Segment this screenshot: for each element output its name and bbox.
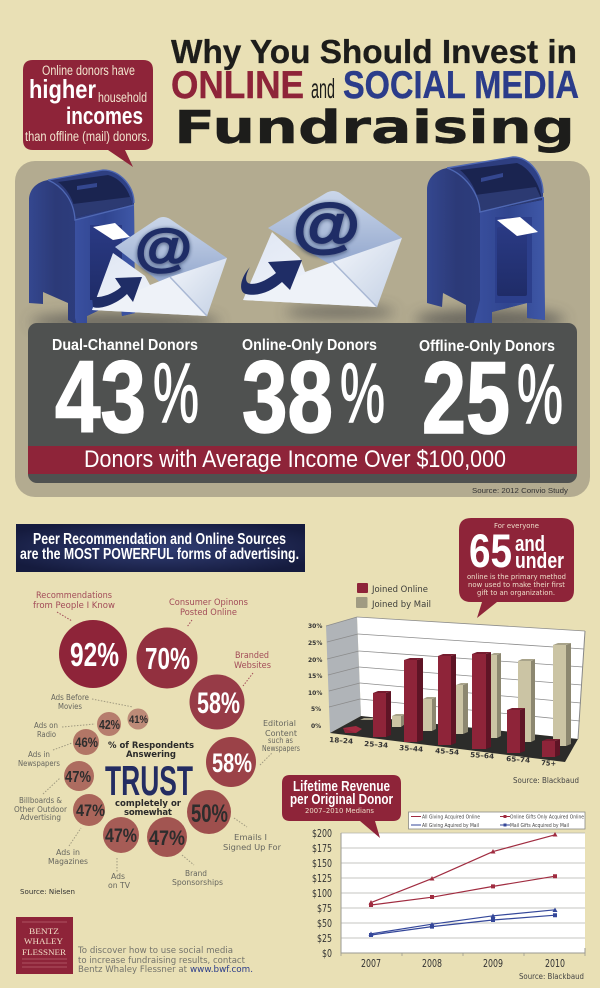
- bubble: ads on radio 42%: Ads on: [34, 721, 58, 730]
- axis labels: age groups: 75+: [541, 759, 557, 768]
- y axis labels: $175: [312, 843, 332, 855]
- bubble: consumer opinions 70%: 70%: [145, 641, 190, 676]
- title: Why You Should Invest in: [171, 33, 577, 70]
- 3d bar chart: joined online vs mail: [308, 583, 585, 785]
- callout: 65 and under: online is the primary method: [467, 573, 566, 581]
- bubble: recommendations 92%: Recommendations: [36, 591, 113, 601]
- logo: bentz whaley flessner: WHALEY: [24, 936, 63, 946]
- bubble: editorial content 58%: Content: [265, 729, 297, 738]
- legend: bars: [356, 583, 431, 610]
- center label: trust: [105, 741, 194, 818]
- bubble: billboards 47%: Advertising: [20, 813, 61, 822]
- panel: donor income: [15, 157, 590, 497]
- bubble: ads in newspapers 46%: 46%: [75, 734, 98, 750]
- footer text: To discover how to use social media: [77, 946, 233, 956]
- callout: 65 and under: For everyone: [494, 522, 539, 530]
- icon: arrow left: [92, 277, 142, 308]
- bubble: ads on radio 42%: [34, 712, 121, 739]
- bubble: ads on tv 47%: Ads: [111, 872, 125, 881]
- bubble: ads before movies 41%: [51, 693, 148, 730]
- series: mail gifts: [369, 913, 557, 937]
- source: convio: Source: 2012 Convio Study: [472, 486, 568, 495]
- axis labels: age groups: 45–54: [435, 747, 459, 757]
- bubble: consumer opinions 70%: Consumer Opinons: [169, 598, 249, 608]
- y axis labels: $75: [317, 903, 332, 915]
- axis labels: age groups: 35–44: [399, 744, 423, 754]
- axis labels: percent: 20%: [308, 657, 322, 664]
- stat: offline-only donors: %: [517, 347, 563, 441]
- icon: center envelope: [241, 191, 402, 307]
- y axis labels: $200: [312, 828, 332, 840]
- bubble: recommendations 92%: 92%: [70, 636, 119, 673]
- callout: lifetime revenue: [282, 775, 401, 838]
- y axis labels: $25: [317, 933, 332, 945]
- bubble: emails 50%: Signed Up For: [223, 843, 282, 852]
- bubble: ads on tv 47%: [103, 817, 139, 890]
- center label: trust: TRUST: [105, 757, 193, 804]
- bubble: billboards 47%: [14, 761, 94, 822]
- bubble: editorial content 58%: [206, 719, 300, 787]
- bubble: ads on tv 47%: 47%: [105, 826, 137, 847]
- footer text: Bentz Whaley Flessner at: [78, 965, 188, 975]
- x axis labels: 2007: [361, 958, 381, 970]
- logo: bentz whaley flessner: [16, 917, 73, 974]
- source: blackbaud bottom: Source: Blackbaud: [519, 972, 584, 981]
- bubble: billboards 47%: 47%: [65, 769, 91, 786]
- x axis labels: 2010: [545, 958, 565, 970]
- callout: higher incomes: higher: [29, 74, 96, 104]
- callout: lifetime revenue: per Original Donor: [290, 791, 393, 808]
- icon: at sign center: @: [293, 192, 360, 258]
- bubble: brand sponsorships 47%: [147, 817, 223, 887]
- title: [171, 33, 579, 154]
- banner: peer recommendation: are the MOST POWERFUL forms of advertising.: [20, 546, 299, 563]
- y axis labels: $100: [312, 888, 332, 900]
- title: Fundraising: [174, 101, 575, 154]
- stat: dual-channel donors: Dual-Channel Donors: [52, 337, 198, 354]
- stat: dual-channel donors: 43: [55, 340, 146, 454]
- bubble: emails 50%: 50%: [191, 800, 228, 828]
- footer text: [77, 946, 253, 975]
- x axis labels: 2009: [483, 958, 503, 970]
- bubble: branded websites 58%: Websites: [234, 661, 272, 671]
- line chart: lifetime revenue: [312, 812, 585, 981]
- stat: dual-channel donors: %: [153, 346, 199, 440]
- icon: center envelope: @: [293, 193, 360, 259]
- bubble: billboards 47%: Other Outdoor: [14, 805, 68, 814]
- stat: online-only donors: 38: [242, 340, 333, 454]
- bubble: editorial content 58%: 58%: [212, 748, 252, 778]
- stat: offline-only donors: 25: [422, 341, 510, 455]
- axis labels: age groups: 18–24: [329, 736, 353, 746]
- plot area: [341, 833, 585, 956]
- income banner: Donors with Average Income Over $100,000: [84, 446, 506, 473]
- bubble: ads on tv 47%: on TV: [108, 881, 130, 890]
- stat: offline-only donors: Offline-Only Donors: [419, 338, 555, 355]
- mailbox shadows: [30, 306, 565, 331]
- axis labels: percent: 30%: [308, 623, 322, 630]
- bars: joined online: [343, 652, 560, 757]
- axis labels: percent: 15%: [308, 673, 322, 680]
- bars: joined by mail: [360, 643, 571, 746]
- banner: peer recommendation: [16, 524, 305, 572]
- axis labels: percent: 5%: [311, 706, 321, 713]
- callout: higher incomes: [23, 60, 153, 167]
- bubble: editorial content 58%: Newspapers: [262, 744, 300, 753]
- bubble: ads before movies 41%: Ads Before: [51, 693, 89, 702]
- footer text: www.bwf.com.: [190, 965, 253, 975]
- icon: right mailbox: [427, 157, 545, 330]
- bubble: magazines 47%: Ads in: [56, 848, 80, 857]
- source: blackbaud top: Source: Blackbaud: [513, 776, 579, 785]
- series: all giving mail: [368, 908, 558, 936]
- banner: peer recommendation: Peer Recommendation and Online Sources: [33, 531, 286, 548]
- bubble: billboards 47%: Billboards &: [19, 796, 62, 805]
- x axis labels: [361, 958, 565, 970]
- callout: 65 and under: [459, 518, 574, 618]
- source: nielsen: Source: Nielsen: [20, 888, 75, 896]
- title: and: [311, 73, 335, 104]
- axis labels: percent: 0%: [311, 723, 321, 730]
- icon: left envelope: [92, 217, 227, 316]
- bubble: branded websites 58%: [190, 651, 272, 730]
- bubble: magazines 47%: [48, 794, 105, 866]
- bubble: emails 50%: Emails I: [234, 833, 267, 842]
- legend: lines: All Giving Acquired Online: [422, 814, 480, 820]
- icon: left mailbox: [29, 170, 135, 325]
- series: all giving acquired online: [368, 832, 558, 904]
- y axis labels: [312, 828, 332, 960]
- bubble: brand sponsorships 47%: 47%: [149, 827, 185, 850]
- callout: lifetime revenue: 2007–2010 Medians: [305, 807, 374, 815]
- bubble chart: trust: [14, 591, 300, 896]
- bubble: magazines 47%: 47%: [76, 801, 105, 820]
- chart walls: [326, 617, 585, 762]
- logo: bentz whaley flessner: FLESSNER: [22, 947, 66, 957]
- bubble: branded websites 58%: Branded: [235, 651, 269, 661]
- stat: online-only donors: Online-Only Donors: [242, 337, 377, 354]
- icon: at sign left: @: [135, 219, 192, 276]
- axis labels: age groups: [329, 736, 557, 768]
- callout: higher incomes: Online donors have: [42, 63, 135, 78]
- legend: lines: All Giving Aquired by Mail: [422, 823, 479, 829]
- bubble: magazines 47%: Magazines: [48, 857, 88, 866]
- axis labels: percent: 25%: [308, 640, 322, 647]
- y axis labels: $125: [312, 873, 332, 885]
- legend: lines: Mail Gifts Acquired by Mail: [510, 823, 569, 829]
- center label: trust: Answering: [126, 750, 176, 760]
- y axis labels: $150: [312, 858, 332, 870]
- bubble: branded websites 58%: 58%: [197, 687, 240, 720]
- bubble: ads on radio 42%: Radio: [37, 730, 56, 739]
- bubble: ads before movies 41%: 41%: [129, 714, 148, 726]
- bubble: recommendations 92%: from People I Know: [33, 601, 115, 611]
- bubble: recommendations 92%: [33, 591, 127, 688]
- legend: bars: Joined by Mail: [371, 600, 431, 610]
- panel: dark stats: [28, 323, 577, 483]
- bubble: emails 50%: [187, 790, 282, 852]
- legend: bars: Joined Online: [371, 585, 428, 595]
- footer text: to increase fundraising results, contact: [78, 956, 246, 966]
- bubble: brand sponsorships 47%: Brand: [185, 869, 207, 878]
- bubble: ads before movies 41%: Movies: [58, 702, 82, 711]
- callout: higher incomes: household: [98, 90, 147, 105]
- legend: lines: [408, 812, 585, 829]
- series: online gifts only: [369, 874, 557, 907]
- title: ONLINE: [171, 64, 304, 107]
- bubble: consumer opinions 70%: Posted Online: [180, 608, 237, 618]
- callout: higher incomes: incomes: [66, 103, 143, 130]
- callout: 65 and under: under: [515, 548, 564, 573]
- bubble: ads in newspapers 46%: [18, 729, 99, 768]
- icon: arrow center: [241, 260, 302, 295]
- axis labels: percent: 10%: [308, 690, 322, 697]
- center label: trust: % of Respondents: [108, 741, 194, 751]
- center label: trust: somewhat: [124, 808, 172, 818]
- bubble: ads in newspapers 46%: Ads in: [28, 750, 50, 759]
- callout: 65 and under: now used to make their first: [468, 581, 565, 589]
- bubble: editorial content 58%: such as: [268, 736, 293, 745]
- axis labels: age groups: 25–34: [364, 740, 388, 750]
- bubble: ads in newspapers 46%: Newspapers: [18, 759, 60, 768]
- callout: higher incomes: than offline (mail) donors.: [25, 129, 150, 144]
- axis labels: age groups: 65–74: [506, 755, 530, 765]
- callout: 65 and under: and: [515, 531, 545, 556]
- legend: lines: Online Gifts Only Acquired Online: [510, 814, 584, 820]
- icon: left envelope: @: [135, 220, 192, 277]
- bubble: editorial content 58%: Editorial: [263, 719, 296, 728]
- axis labels: percent: [308, 623, 322, 730]
- stat: online-only donors: %: [340, 346, 385, 440]
- bubble: consumer opinions 70%: [136, 598, 249, 688]
- logo: bentz whaley flessner: BENTZ: [29, 926, 59, 936]
- callout: 65 and under: gift to an organization.: [477, 589, 555, 597]
- center label: trust: completely or: [115, 799, 182, 809]
- bubble: ads on radio 42%: 42%: [99, 717, 120, 732]
- x axis labels: 2008: [422, 958, 442, 970]
- axis labels: age groups: 55–64: [470, 751, 494, 761]
- callout: lifetime revenue: Lifetime Revenue: [293, 778, 390, 795]
- bubble: brand sponsorships 47%: Sponsorships: [172, 878, 223, 887]
- y axis labels: $50: [317, 918, 332, 930]
- callout: 65 and under: 65: [469, 524, 512, 577]
- y axis labels: $0: [322, 948, 332, 960]
